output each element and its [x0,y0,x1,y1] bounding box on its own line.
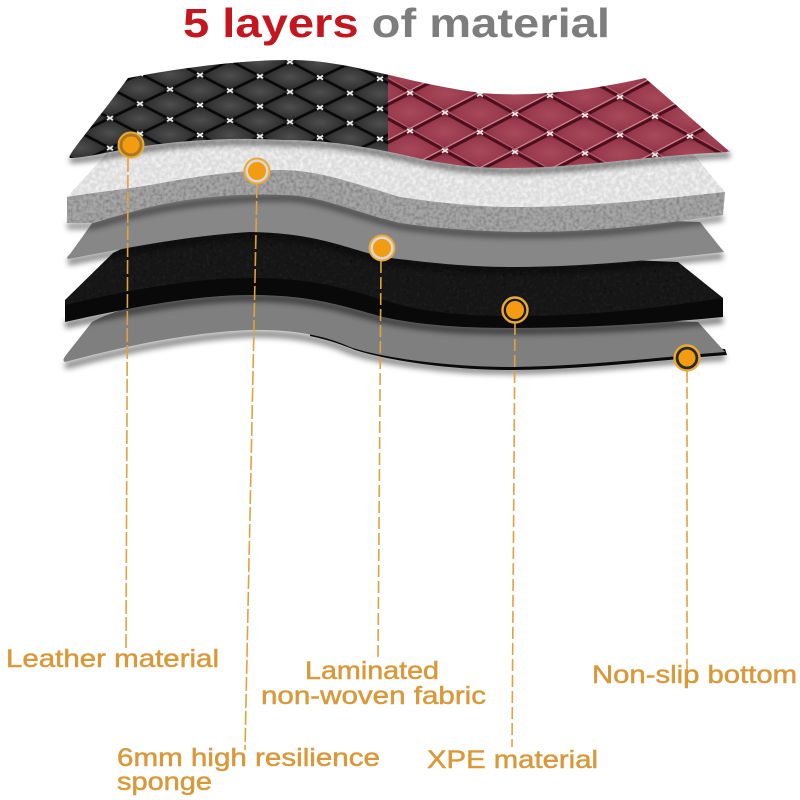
layer 4: XPE material [65,226,723,331]
callout: leather material line and marker [118,132,144,650]
red quilted half [388,74,730,168]
callout: non-slip line and marker [674,346,700,688]
label: 6mm high resilience sponge: sponge [117,768,212,796]
callout: XPE line and marker [502,298,528,747]
callout: sponge line and marker [244,158,270,750]
layer 5: non-slip bottom [63,293,727,371]
layer 1: leather material (black and red quilted) [60,55,738,175]
label: laminated non-woven fabric: non-woven fabric [261,682,486,710]
title: 5 layers of material [183,0,610,46]
label: laminated non-woven fabric: Laminated [305,657,439,685]
layer 2: 6mm high resilience sponge [67,128,725,235]
label: leather material: Leather material [6,645,219,673]
label: non-slip bottom: Non-slip bottom [592,661,797,689]
label: 6mm high resilience sponge: 6mm high resilience [117,744,380,772]
black quilted half [70,60,388,158]
layer 3: laminated non-woven fabric [67,189,724,270]
callout: laminated fabric line and marker [370,236,394,658]
label: XPE material: XPE material [427,746,598,774]
